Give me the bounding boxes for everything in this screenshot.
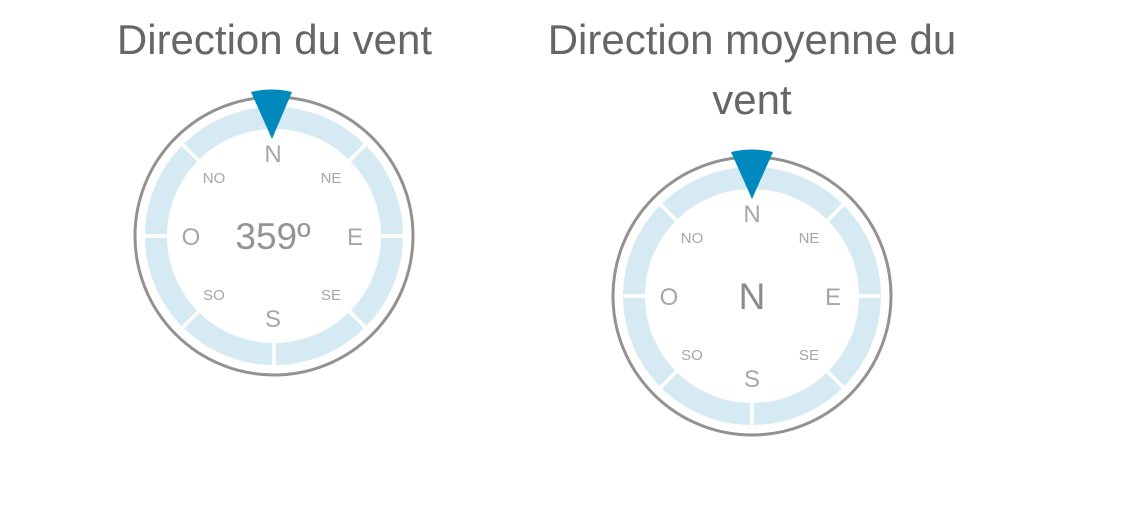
compass outer ring	[135, 97, 413, 375]
value: 359 degrees: 359º	[235, 216, 311, 257]
value: N: N	[739, 276, 765, 317]
cardinal labels: SE	[799, 347, 819, 364]
cardinal labels	[660, 201, 841, 393]
cardinal labels: E	[825, 284, 841, 311]
compass outer ring	[613, 157, 891, 435]
cardinal labels: SO	[203, 287, 225, 304]
pointer	[251, 90, 292, 139]
cardinal labels: N	[264, 141, 282, 168]
cardinal labels: N	[743, 201, 761, 228]
cardinal labels: S	[744, 366, 760, 393]
cardinal labels: O	[182, 224, 200, 251]
cardinal labels: SE	[321, 287, 341, 304]
cardinal labels	[182, 141, 363, 333]
title: Direction moyenne du vent: Direction moyenne du	[548, 16, 956, 63]
cardinal labels: NO	[203, 170, 225, 187]
cardinal labels: SO	[681, 347, 703, 364]
compass light blue segmented band	[143, 105, 405, 367]
compass light blue segmented band	[621, 165, 883, 427]
cardinal labels: S	[265, 306, 281, 333]
title: Direction moyenne du vent	[548, 16, 956, 123]
compass: average wind direction	[613, 150, 891, 435]
title: Direction du vent: Direction du vent	[117, 16, 432, 63]
cardinal labels: O	[660, 284, 678, 311]
cardinal labels: E	[347, 224, 363, 251]
compass: wind direction	[135, 90, 413, 375]
title: Direction moyenne du vent: vent	[712, 76, 792, 123]
cardinal labels: NE	[321, 170, 341, 187]
pointer	[731, 150, 773, 199]
cardinal labels: NO	[681, 230, 703, 247]
cardinal labels: NE	[799, 230, 819, 247]
